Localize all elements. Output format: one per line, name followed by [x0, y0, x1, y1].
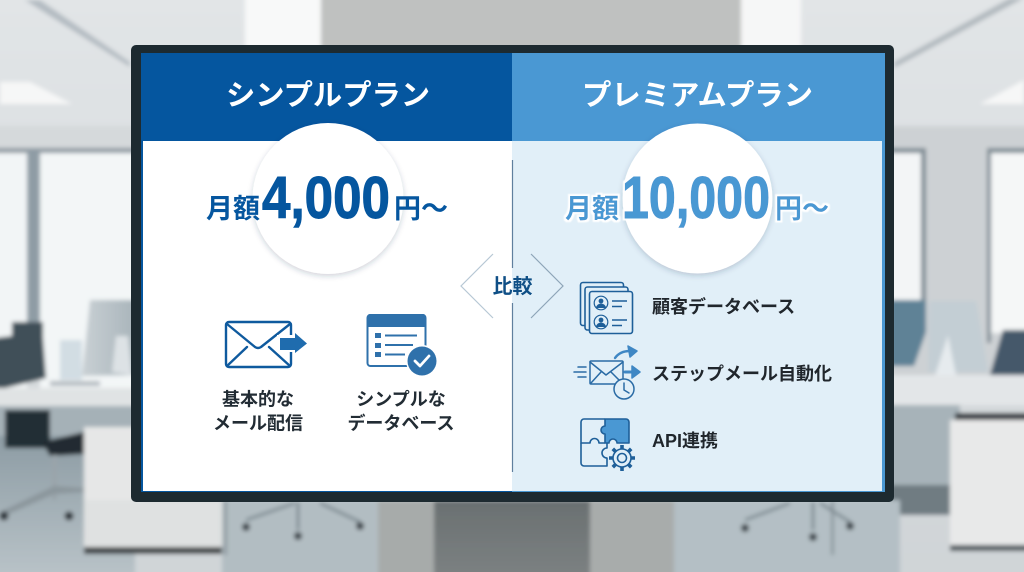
icon: customer cards — [580, 282, 632, 334]
right side — [890, 126, 1024, 386]
text: basic mail delivery: 基本的な — [222, 390, 294, 410]
comparison marker — [461, 160, 563, 472]
left side — [25, 0, 130, 67]
price: 10,000 yen — [565, 165, 829, 231]
text: basic mail delivery — [213, 390, 303, 434]
price: 4,000 yen: 月額 — [206, 194, 260, 224]
heading: simple plan: シンプルプラン — [226, 79, 430, 112]
price circle: premium plan — [622, 124, 772, 274]
top centre — [245, 0, 321, 50]
panel: simple plan — [141, 53, 513, 492]
price: 10,000 yen: 円～ — [775, 194, 829, 224]
heading: premium plan: プレミアムプラン — [582, 79, 813, 112]
price: 10,000 yen: 月額 — [565, 194, 619, 224]
icon: API puzzle and gear — [581, 419, 635, 471]
icon: simple database — [367, 314, 438, 377]
screen — [141, 53, 885, 492]
text: basic mail delivery: メール配信 — [213, 414, 303, 434]
icon: step mail automation — [574, 346, 640, 399]
text: simple database — [347, 390, 455, 434]
price: 4,000 yen: 円～ — [394, 194, 448, 224]
monitor frame — [131, 45, 894, 502]
price: 4,000 yen: 4,000 — [262, 165, 390, 231]
text: simple database: シンプルな — [356, 390, 446, 410]
text: simple database: データベース — [347, 412, 455, 434]
label: comparison: 比較 — [492, 275, 532, 298]
icon: mail send — [226, 322, 307, 367]
text: API integration: API連携 — [652, 431, 718, 451]
price: 4,000 yen — [206, 165, 448, 231]
text: step mail automation: ステップメール自動化 — [652, 364, 832, 384]
price circle: simple plan — [252, 123, 404, 274]
price: 10,000 yen: 10,000 — [622, 165, 770, 231]
bottom centre — [85, 500, 222, 547]
text: customer database: 顧客データベース — [652, 296, 795, 317]
panel: premium plan — [512, 53, 885, 492]
